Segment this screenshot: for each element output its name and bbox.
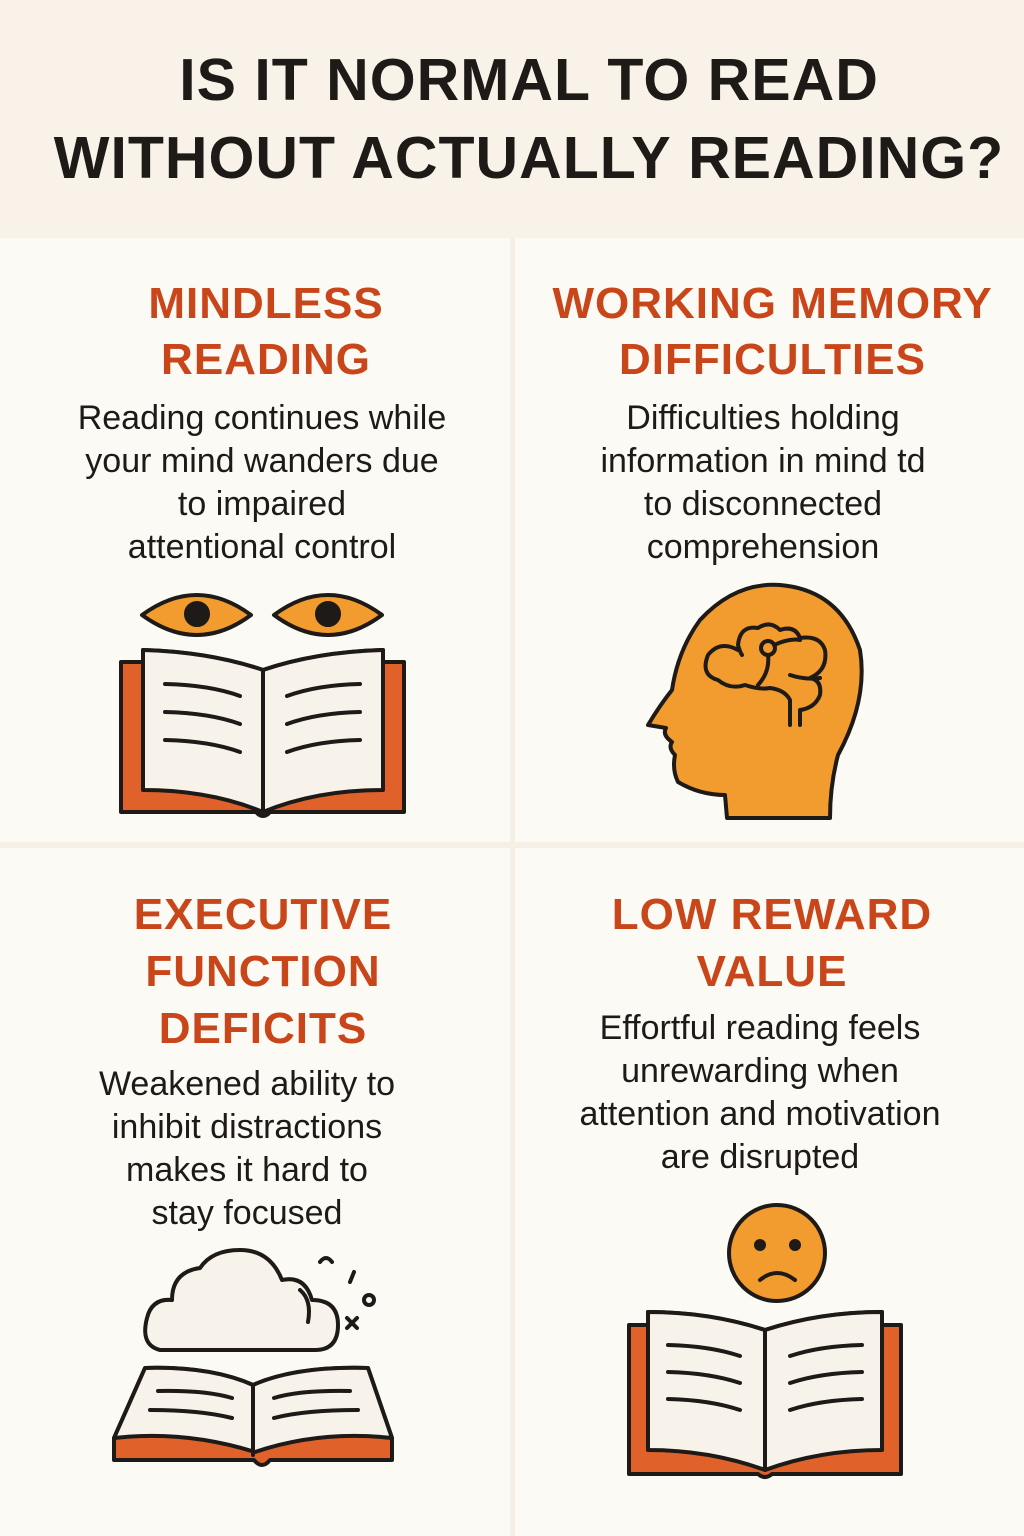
text: executive function: inhibit distractions — [112, 1108, 382, 1146]
text: low reward: attention and motivation — [579, 1095, 941, 1133]
panel: low reward value — [579, 890, 941, 1480]
text: low reward: unrewarding when — [621, 1052, 899, 1090]
heading: mindless reading — [148, 279, 384, 384]
text: mindless reading: Reading continues while — [78, 399, 446, 437]
text: low reward: Effortful reading feels — [600, 1009, 920, 1047]
text: low reward — [579, 1009, 941, 1176]
heading: low reward: VALUE — [697, 947, 847, 996]
heading: working memory: DIFFICULTIES — [619, 335, 926, 384]
heading: executive function: DEFICITS — [159, 1004, 367, 1053]
text: working memory — [600, 399, 926, 566]
text: mindless reading: to impaired — [178, 485, 346, 523]
text: executive function: stay focused — [152, 1194, 342, 1232]
heading: working memory — [552, 279, 993, 384]
text: working memory: Difficulties holding — [626, 399, 900, 437]
panel: mindless reading — [78, 279, 446, 818]
heading: mindless reading: READING — [161, 335, 371, 384]
heading: executive function — [134, 890, 392, 1053]
panel: executive function deficits — [99, 890, 395, 1467]
text: executive function — [99, 1065, 395, 1232]
text: working memory: to disconnected — [644, 485, 882, 523]
panel: working memory difficulties — [552, 279, 993, 820]
title band: WITHOUT ACTUALLY READING? — [54, 125, 1004, 191]
text: mindless reading: your mind wanders due — [85, 442, 439, 480]
icon: sad face over book — [627, 1203, 903, 1480]
text: working memory: information in mind td — [600, 442, 926, 480]
text: low reward: are disrupted — [661, 1138, 859, 1176]
heading: executive function: FUNCTION — [145, 947, 381, 996]
text: working memory: comprehension — [647, 528, 879, 566]
text: executive function: Weakened ability to — [99, 1065, 395, 1103]
text: mindless reading — [78, 399, 446, 566]
heading: working memory: WORKING MEMORY — [552, 279, 993, 328]
icon: cloud over book — [112, 1248, 394, 1467]
icon: eyes over open book — [119, 593, 406, 818]
text: executive function: makes it hard to — [126, 1151, 368, 1189]
icon: head with brain — [646, 582, 864, 820]
title band — [0, 0, 1024, 238]
heading: mindless reading: MINDLESS — [148, 279, 384, 328]
heading: low reward — [612, 890, 932, 996]
heading: low reward: LOW REWARD — [612, 890, 932, 939]
text: mindless reading: attentional control — [128, 528, 396, 566]
heading: executive function: EXECUTIVE — [134, 890, 392, 939]
title band: IS IT NORMAL TO READ — [179, 47, 879, 113]
